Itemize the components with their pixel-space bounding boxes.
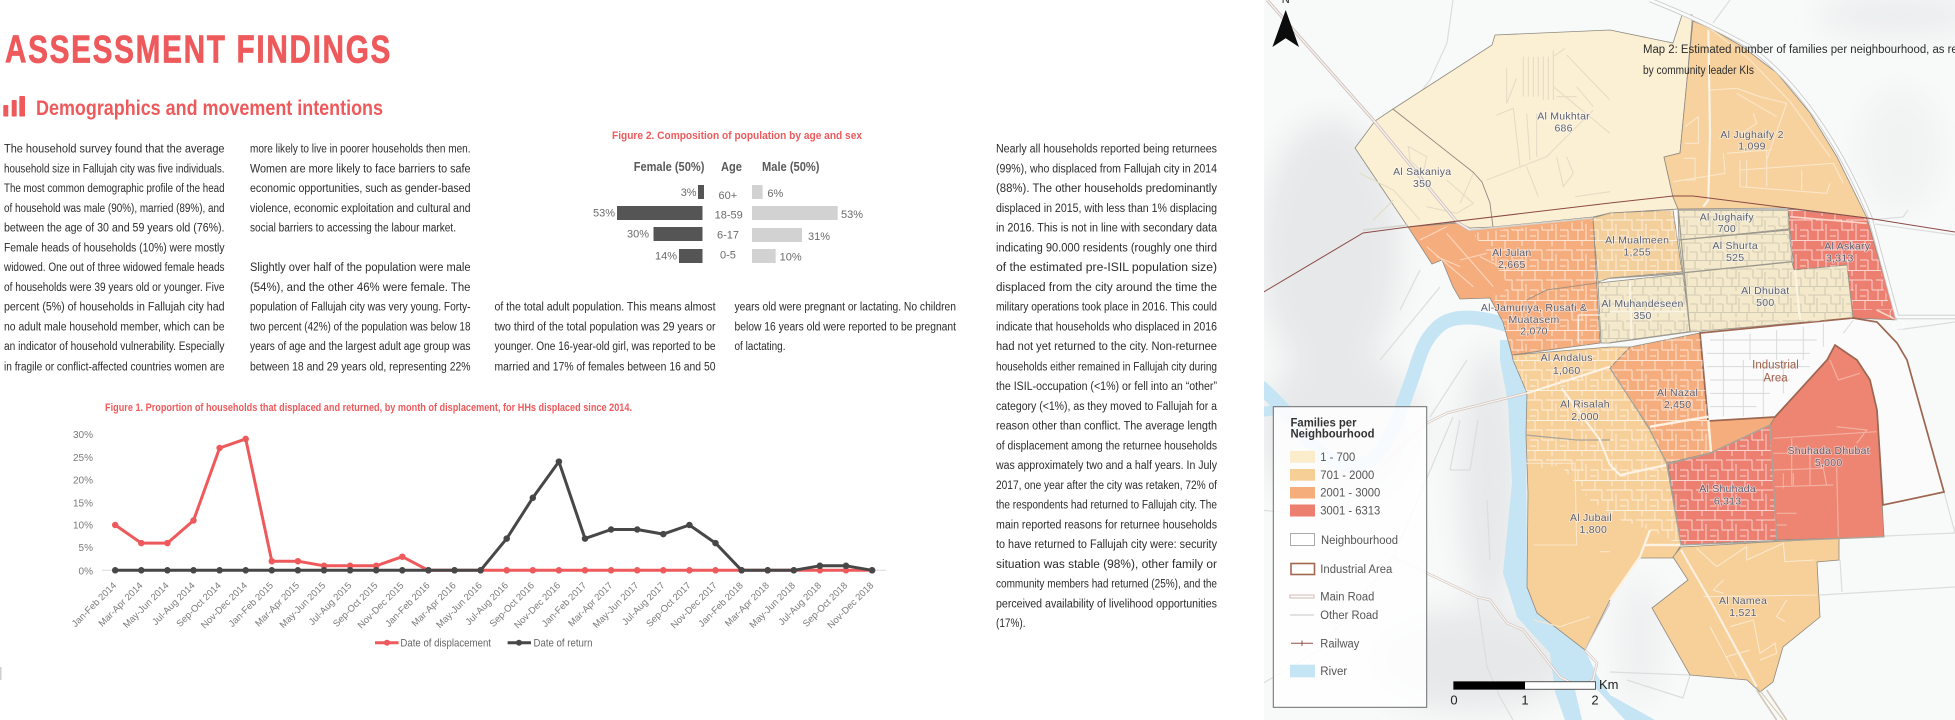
text block: column 5: 2017, one year after the city was retaken, 72% of <box>996 480 1218 492</box>
map labels: neighbourhood names and family counts: 1,800 <box>1580 524 1607 536</box>
scale bar: 0 <box>1450 692 1458 708</box>
y axis labels: 5% <box>79 543 93 554</box>
text block: column 2: violence, economic exploitation and cultural and <box>250 203 470 215</box>
zone: Al Namea <box>1652 538 1839 692</box>
map labels: neighbourhood names and family counts: Al Nazal <box>1657 387 1698 399</box>
x axis labels: Jan-Feb 2015 <box>227 580 276 630</box>
zone: Al Mualmeen <box>1593 210 1682 282</box>
text block: column 3: two third of the total population was 29 years or <box>494 321 716 333</box>
map labels: neighbourhood names and family counts: Al Sakaniya <box>1393 166 1451 178</box>
zone: Al Shurta <box>1679 229 1792 273</box>
map labels: neighbourhood names and family counts: Al Askary <box>1824 240 1871 252</box>
map legend: 3001 - 6313 <box>1320 506 1380 518</box>
zone: Al Nazal <box>1610 333 1775 463</box>
map labels: neighbourhood names and family counts <box>1393 110 1871 619</box>
x axis labels: Jan-Feb 2018 <box>696 580 746 630</box>
text block: column 1: no adult male household member, which can be <box>4 321 224 333</box>
text block: column 1: The most common demographic profile of the head <box>4 183 224 195</box>
map: families per neighbourhood <box>1260 0 1955 720</box>
bar value labels: 53% <box>593 208 615 220</box>
bar value labels: 14% <box>655 250 677 262</box>
figure 1: line chart <box>70 402 886 650</box>
river <box>1262 318 1655 720</box>
text block: column 3: younger. One 16-year-old girl, was reported to be <box>494 341 716 353</box>
y axis labels: 25% <box>73 453 93 464</box>
map labels: neighbourhood names and family counts: Al Muhandeseen <box>1601 298 1684 310</box>
legend heading: Neighbourhood <box>1290 428 1374 440</box>
map labels: neighbourhood names and family counts: 1,060 <box>1553 365 1580 377</box>
x axis labels: May-Jun 2016 <box>434 580 485 631</box>
map labels: neighbourhood names and family counts: Shuhada Dhubat <box>1788 445 1870 457</box>
text block: column 5: indicate that households who displaced in 2016 <box>996 321 1217 333</box>
text block: column 2: between 18 and 29 years old, representing 22% <box>250 362 470 374</box>
zone: Industrial Area <box>1700 318 1944 505</box>
bar value labels: 53% <box>841 209 863 221</box>
x axis labels: Jul-Aug 2017 <box>620 580 667 628</box>
map legend: Other Road <box>1320 610 1378 622</box>
section heading: demographics and movement intentions: Demographics and movement intentions <box>36 97 383 120</box>
y axis labels: 20% <box>73 476 93 486</box>
text block: column 5: perceived availability of livelihood opportunities <box>996 598 1217 610</box>
zone: Al Andalus, Al Risalah and Al Jubail <box>1512 347 1681 650</box>
text block: column 1: an indicator of household vulnerability. Especially <box>4 341 225 353</box>
arc road and diagonal main road <box>1267 0 1955 317</box>
x axis labels <box>70 580 876 631</box>
map labels: neighbourhood names and family counts: 350 <box>1633 310 1652 322</box>
map labels: neighbourhood names and family counts: Al Risalah <box>1560 398 1610 410</box>
legend labels: 1 - 700 <box>1320 452 1355 464</box>
text block: column 5: Nearly all households reported being returnees <box>996 144 1217 156</box>
text block: column 2 <box>250 144 471 374</box>
text block: column 5: community members had returned (25%), and the <box>996 579 1217 591</box>
series: date of return <box>115 462 872 570</box>
map caption: by community leader KIs <box>1643 65 1754 77</box>
zone: Al Askary <box>1788 209 1897 320</box>
zone: Al Mukhtar <box>1393 15 1692 227</box>
x axis labels: Jan-Feb 2016 <box>383 580 433 630</box>
railway <box>1262 196 1955 293</box>
x axis labels: May-Jun 2015 <box>278 580 328 631</box>
x axis labels: Nov-Dec 2015 <box>356 580 406 631</box>
map legend: Industrial Area <box>1320 564 1393 576</box>
map legend: River <box>1320 666 1347 678</box>
text block: column 4: of lactating. <box>734 341 786 353</box>
y axis labels: 0% <box>79 566 93 578</box>
map label: industrial area: Area <box>1763 372 1788 384</box>
chart legend: Date of displacement <box>400 638 491 650</box>
x axis labels: Mar-Apr 2015 <box>253 580 302 629</box>
map labels: neighbourhood names and family counts: Al Shurta <box>1712 240 1758 252</box>
text block: column 4: below 16 years old were reported to be pregnant <box>734 321 957 333</box>
x axis labels: Jul-Aug 2018 <box>777 580 824 628</box>
street textures <box>1473 209 1890 545</box>
text block: column 5: (88%). The other households predominantly <box>996 183 1217 195</box>
map labels: neighbourhood names and family counts: 6,313 <box>1714 496 1741 508</box>
map labels: neighbourhood names and family counts: 525 <box>1726 252 1744 264</box>
y axis labels <box>73 430 93 578</box>
y axis labels: 30% <box>73 430 93 441</box>
terrain mottling <box>1260 0 1955 710</box>
text block: column 2: population of Fallujah city was very young. Forty- <box>250 302 471 314</box>
x axis labels: Sep-Oct 2017 <box>644 580 694 630</box>
x axis labels: Sep-Oct 2016 <box>488 580 537 630</box>
map labels: neighbourhood names and family counts: Al Dhubat <box>1741 285 1789 297</box>
map legend: Railway <box>1320 638 1360 650</box>
scale bar: 1 <box>1521 692 1529 708</box>
text block: column 5: (99%), who displaced from Fallujah city in 2014 <box>996 163 1218 175</box>
streets: crop C coordinates <box>1526 367 1610 650</box>
map legend: Main Road <box>1320 592 1374 604</box>
scale bar <box>1450 677 1618 708</box>
bar value labels: 30% <box>627 228 649 240</box>
text block: column 1: widowed. One out of three widowed female heads <box>3 262 225 274</box>
text block: column 5: in 2016. This is not in line with secondary data <box>996 223 1218 235</box>
text block: column 2: Slightly over half of the population were male <box>250 262 470 274</box>
map labels: neighbourhood names and family counts: Al Jubail <box>1570 512 1612 524</box>
zone: Shuhada Dhubat <box>1770 345 1884 540</box>
map labels: neighbourhood names and family counts: Al Jughaify 2 <box>1720 129 1784 141</box>
map caption <box>1643 44 1955 77</box>
icon: north arrow <box>1272 0 1299 47</box>
zone: Al Julan and Al-Jamuriya <box>1408 218 1600 355</box>
text block: column 5: category (<1%), as they moved to Fallujah for a <box>996 401 1218 413</box>
text block: column 3: of the total adult population. This means almost <box>494 302 716 314</box>
x axis labels: May-Jun 2018 <box>748 580 798 631</box>
zone: Al Sakaniya <box>1355 109 1493 228</box>
streets: crop B industrial <box>1707 320 1853 360</box>
text block: column 2: Women are more likely to face barriers to safe <box>250 163 470 175</box>
x axis labels: Jul-Aug 2014 <box>150 580 198 628</box>
text block: column 2: two percent (42%) of the population was below 18 <box>250 321 470 333</box>
pink-cased secondary roads <box>1394 392 1598 682</box>
map labels: neighbourhood names and family counts: 350 <box>1413 178 1431 190</box>
x axis labels: Mar-Apr 2018 <box>723 580 772 629</box>
map labels: neighbourhood names and family counts: 700 <box>1718 223 1736 235</box>
map label: industrial area: Industrial <box>1752 360 1799 372</box>
map labels: neighbourhood names and family counts: Al Shuhada <box>1699 483 1756 495</box>
title: ASSESSMENT FINDINGS <box>5 28 392 72</box>
text block: column 1 <box>3 144 225 374</box>
text block: column 3 <box>494 302 716 374</box>
text block: column 2: years of age and the largest adult age group was <box>250 341 471 353</box>
text block: column 3: married and 17% of females between 16 and 50 <box>494 362 716 374</box>
column headers: Male (50%) <box>762 160 820 174</box>
map labels: neighbourhood names and family counts: 2,450 <box>1664 399 1691 411</box>
bar value labels: 6% <box>767 188 784 200</box>
map label: industrial area <box>1752 360 1799 384</box>
map labels: neighbourhood names and family counts: Al Mualmeen <box>1605 234 1669 246</box>
streets: crop D coordinates <box>1610 360 1884 720</box>
male bars <box>752 185 838 263</box>
bar value labels: 3% <box>681 187 697 199</box>
zone: Al Muhandeseen <box>1598 274 1690 343</box>
text block: column 5: military operations took place in 2016. This could <box>996 302 1217 314</box>
text block: column 1: The household survey found that the average <box>4 144 224 156</box>
bar value labels: 31% <box>808 231 830 243</box>
text block: column 2: social barriers to accessing the labour market. <box>250 223 456 235</box>
x axis labels: Mar-Apr 2014 <box>97 580 145 629</box>
map labels: neighbourhood names and family counts: Al Jughaify <box>1700 212 1754 224</box>
map labels: neighbourhood names and family counts: 500 <box>1756 297 1774 309</box>
figure 2: population pyramid <box>593 130 863 264</box>
map labels: neighbourhood names and family counts: Al Andalus <box>1541 352 1593 364</box>
map labels: neighbourhood names and family counts: 1,255 <box>1623 246 1651 258</box>
y axis labels: 15% <box>73 498 93 510</box>
map labels: neighbourhood names and family counts: Al Namea <box>1719 595 1767 607</box>
map labels: neighbourhood names and family counts: Muatasem <box>1508 314 1560 326</box>
text block: column 2: more likely to live in poorer households then men. <box>250 144 470 156</box>
column headers <box>634 160 820 174</box>
y axis labels: 10% <box>73 520 93 532</box>
text block: column 5: the respondents had returned to Fallujah city. The <box>996 500 1217 512</box>
zone: Al Shuhada <box>1668 425 1777 545</box>
map labels: neighbourhood names and family counts: Al-Jamuriya, Rusafi & <box>1481 302 1587 314</box>
text block: column 1: between the age of 30 and 59 years old (76%). <box>4 223 224 235</box>
figure 1 title: Figure 1. Proportion of households that displaced and returned, by month of displacement, for HHs displaced since 2014. <box>105 402 632 414</box>
text block: column 5: households either remained in Fallujah city during <box>996 362 1217 374</box>
text block: column 5: was approximately two and a half years. In July <box>995 460 1217 472</box>
bar value labels: 6-17 <box>717 230 739 242</box>
text block: column 1: household size in Fallujah city was five individuals. <box>4 163 224 175</box>
map labels: neighbourhood names and family counts: 3,313 <box>1826 252 1854 264</box>
map legend <box>1273 407 1427 707</box>
column headers: Female (50%) <box>634 160 704 174</box>
icon: bar chart <box>3 96 25 116</box>
map labels: neighbourhood names and family counts: Al Mukhtar <box>1537 110 1590 122</box>
scale bar: 2 <box>1591 692 1599 708</box>
text block: column 5: of the estimated pre-ISIL population size) <box>996 262 1217 274</box>
text block: column 4 <box>734 302 957 353</box>
text block: column 5: indicating 90.000 residents (roughly one third <box>996 242 1217 254</box>
chart legend <box>375 638 592 650</box>
figure 2 title: Figure 2. Composition of population by age and sex <box>612 130 863 142</box>
x axis labels: Nov-Dec 2017 <box>669 580 720 631</box>
text block: column 1: in fragile or conflict-affected countries women are <box>4 362 224 374</box>
x axis labels: Jan-Feb 2017 <box>540 580 589 630</box>
series: date of displacement <box>115 439 872 570</box>
map labels: neighbourhood names and family counts: Al Julan <box>1492 247 1531 259</box>
map labels: neighbourhood names and family counts: 2,000 <box>1571 411 1599 423</box>
zone: Al Jughaify 2 <box>1664 21 1867 218</box>
text block: column 5: the ISIL-occupation (<1%) or fell into an “other” <box>996 381 1217 393</box>
bar value labels: 18-59 <box>715 210 743 222</box>
background roads <box>1260 0 1955 720</box>
x axis labels: May-Jun 2014 <box>121 580 172 631</box>
map legend: Neighbourhood <box>1321 535 1398 547</box>
text block: column 4: years old were pregnant or lactating. No children <box>734 302 956 314</box>
text block: column 5: had not yet returned to the city. Non-returnee <box>996 341 1217 353</box>
text block: column 5: main reported reasons for returnee households <box>996 519 1217 531</box>
x axis labels: Nov-Dec 2014 <box>199 580 250 631</box>
text block: column 5: of displacement among the returnee households <box>996 440 1217 452</box>
x axis labels: Mar-Apr 2016 <box>410 580 459 629</box>
legend heading: Families per <box>1290 418 1357 430</box>
bar value labels: 10% <box>780 252 802 264</box>
map legend: 2001 - 3000 <box>1320 488 1380 500</box>
map labels: neighbourhood names and family counts: 1,099 <box>1738 140 1766 152</box>
bar value labels: 60+ <box>718 190 737 202</box>
legend heading <box>1290 418 1374 440</box>
x axis labels: Jan-Feb 2014 <box>70 580 119 630</box>
text block: column 2: economic opportunities, such as gender-based <box>250 183 470 195</box>
text block: column 2: (54%), and the other 46% were female. The <box>250 282 470 294</box>
x axis labels: Nov-Dec 2016 <box>512 580 563 631</box>
zone: Al Jughaify <box>1678 210 1789 240</box>
map labels: neighbourhood names and family counts: 5,000 <box>1815 457 1842 469</box>
text block: column 5: reason other than conflict. The average length <box>996 421 1217 433</box>
text block: column 1: of household was male (90%), married (89%), and <box>4 203 224 215</box>
chart legend: Date of return <box>534 638 592 650</box>
text block: column 5: situation was stable (98%), other family or <box>996 559 1217 571</box>
map labels: neighbourhood names and family counts: 686 <box>1554 122 1573 134</box>
map labels: neighbourhood names and family counts: 2,070 <box>1520 326 1548 338</box>
text block: column 1: of households were 39 years old or younger. Five <box>4 282 224 294</box>
text block: column 1: percent (5%) of households in Fallujah city had <box>4 302 224 314</box>
text block: column 5: displaced in 2015, with less than 1% displacing <box>996 203 1217 215</box>
map labels: neighbourhood names and family counts: 1,521 <box>1729 607 1757 619</box>
x axis labels: Sep-Oct 2015 <box>331 580 380 630</box>
text block: column 5 <box>995 144 1218 630</box>
column headers: Age <box>721 160 742 174</box>
x axis labels: Sep-Oct 2014 <box>174 580 224 630</box>
female bars <box>617 185 704 263</box>
map legend: 701 - 2000 <box>1320 470 1374 482</box>
text block: column 1: Female heads of households (10%) were mostly <box>4 242 225 254</box>
bar value labels: 0-5 <box>720 250 736 262</box>
scale bar: Km <box>1599 677 1618 692</box>
zone: Al Dhubat <box>1683 262 1853 332</box>
x axis labels: May-Jun 2017 <box>591 580 641 631</box>
x axis labels: Jul-Aug 2016 <box>463 580 511 628</box>
streets: crop B coordinates <box>1610 28 1904 343</box>
zones <box>1355 15 1944 692</box>
x axis labels: Nov-Dec 2018 <box>825 580 876 631</box>
legend swatches <box>1290 451 1315 463</box>
streets: crop A coordinates <box>1360 48 1610 343</box>
text block: column 5: displaced from the city around the time the <box>996 282 1217 294</box>
map labels: neighbourhood names and family counts: 2,665 <box>1498 259 1526 271</box>
bar value labels <box>593 187 863 264</box>
x axis labels: Sep-Oct 2018 <box>801 580 850 630</box>
text block: column 5: to have returned to Fallujah city were: security <box>996 539 1217 551</box>
x axis labels: Jul-Aug 2015 <box>307 580 354 628</box>
x axis labels: Mar-Apr 2017 <box>566 580 615 629</box>
text block: column 5: (17%). <box>996 618 1026 630</box>
